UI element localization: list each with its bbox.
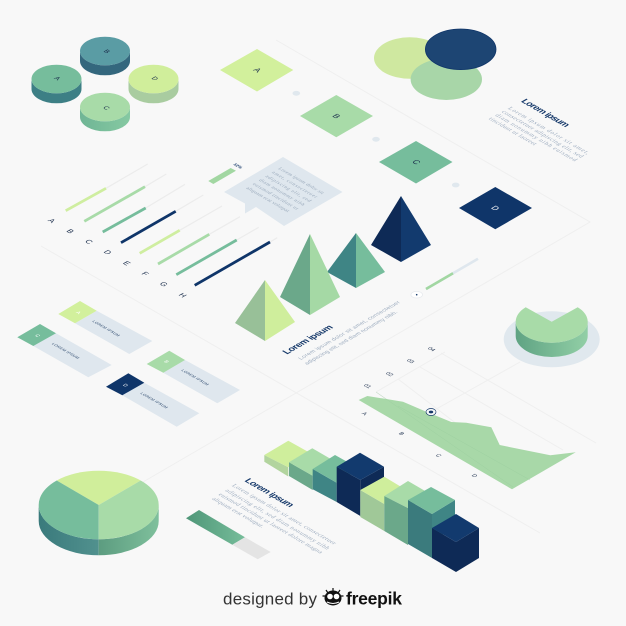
- text block: lower lorem ipsum: aliquam erat volutpat.: [210, 496, 266, 529]
- bar labels: D: [101, 249, 114, 256]
- progress bar: lower left: [186, 510, 271, 559]
- chart axis labels: 01: [362, 383, 372, 390]
- stacked block bars: [264, 441, 479, 572]
- bar H: [195, 242, 270, 285]
- list item C: [17, 324, 112, 377]
- area chart: [359, 346, 576, 489]
- list item B: LOREM IPSUM: [180, 368, 210, 386]
- list item A: LOREM IPSUM: [91, 319, 121, 337]
- disc A: A: [52, 76, 62, 82]
- legend swatch 12%: [208, 162, 244, 184]
- disc D: [128, 65, 178, 103]
- footer: designed by freepik: [223, 588, 402, 608]
- diamond A: A: [251, 67, 264, 74]
- bar labels: C: [83, 238, 96, 246]
- list item D: [106, 373, 199, 427]
- bar labels: H: [176, 292, 189, 299]
- callout: speech bubble: aliquam erat volutpat: [244, 186, 291, 213]
- diamond A: [220, 49, 293, 92]
- bar labels: E: [121, 260, 133, 267]
- disc C: [80, 93, 130, 131]
- block 2: [289, 448, 336, 490]
- text block: top right lorem ipsum: [487, 97, 592, 163]
- list item B: B: [162, 360, 170, 365]
- diamond C: [379, 141, 452, 184]
- callout: speech bubble: [224, 157, 342, 226]
- text block: lower lorem ipsum: [210, 477, 339, 555]
- icon: freepik bee: [322, 588, 344, 606]
- diamond B: [300, 95, 373, 137]
- block 1: [264, 441, 312, 476]
- text block: lower lorem ipsum: Lorem ipsum dolor sit amet, consectetuer: [230, 483, 339, 546]
- list item C: LOREM IPSUM: [51, 342, 81, 360]
- chart axis labels: B: [397, 432, 405, 437]
- venn diagram: [374, 29, 496, 100]
- diamond D: D: [489, 205, 502, 212]
- bar chart: horizontal isometric bars A-H: [46, 164, 277, 299]
- diamond C: C: [410, 159, 423, 166]
- callout: speech bubble: euismod tincidunt ut: [250, 182, 300, 211]
- chart axis labels: D: [470, 473, 478, 479]
- chart axis labels: 04: [426, 346, 436, 353]
- bar C: [103, 208, 146, 232]
- text block: top right lorem ipsum: diam nonummy nibh euismod: [493, 113, 580, 163]
- text block: top right lorem ipsum: tincidunt ut laoreet: [487, 116, 539, 147]
- callout: speech bubble: adipiscing elit, sed: [263, 174, 313, 203]
- list item A: A: [74, 311, 82, 316]
- panel: four discs A B C D: [32, 37, 178, 131]
- bar G: [176, 240, 237, 275]
- footer: designed by freepik: freepik: [346, 588, 402, 608]
- pie chart: large: [39, 471, 159, 555]
- bar D: [121, 211, 176, 243]
- progress slider: [411, 259, 478, 298]
- bar labels: G: [157, 281, 170, 288]
- pyramid chart: [235, 196, 431, 341]
- list item D: LOREM IPSUM: [139, 391, 169, 409]
- chart marker: [426, 408, 436, 416]
- text block: below pyramids: adipiscing elit, sed diam nonummy nibh.: [304, 310, 400, 366]
- text block: top right lorem ipsum: consectetuer adipiscing elit, sed: [499, 109, 586, 159]
- text block: lower lorem ipsum: euismod tincidunt ut laoreet dolore magna: [216, 492, 325, 555]
- disc B: [80, 37, 130, 75]
- chart axis labels: A: [360, 412, 368, 417]
- bar B: [84, 187, 145, 221]
- pyramid teal: [327, 233, 385, 288]
- bar E: [140, 230, 180, 253]
- block 7: [408, 487, 455, 558]
- block 3: [313, 455, 360, 502]
- diamond D: [459, 187, 532, 229]
- diamond B: B: [330, 113, 342, 120]
- chart axis labels: [360, 346, 478, 479]
- chart axis labels: 03: [405, 358, 415, 365]
- list item A: [58, 301, 152, 354]
- bar labels: A: [46, 217, 58, 224]
- legend swatch 12%: 12%: [232, 162, 244, 169]
- footer: designed by freepik: designed by: [223, 590, 318, 608]
- disc B: B: [101, 49, 111, 55]
- chart axis labels: 02: [384, 371, 394, 378]
- chart axis labels: C: [434, 453, 442, 459]
- disc A: [32, 65, 82, 103]
- block 4: [337, 453, 384, 516]
- block 5: [360, 477, 408, 531]
- disc C: C: [101, 105, 111, 111]
- pyramid green: [280, 234, 340, 315]
- callout: speech bubble: diam nonummy nibh: [257, 178, 307, 207]
- bar A: [66, 188, 106, 211]
- list item D: D: [121, 383, 129, 388]
- bar labels: B: [64, 228, 76, 235]
- bar labels: F: [139, 270, 151, 277]
- text block: below pyramids: Lorem ipsum: [280, 323, 335, 356]
- list item C: C: [33, 334, 42, 339]
- pyramid light: [235, 280, 295, 341]
- pyramid navy: [371, 196, 431, 262]
- text block: below pyramids: Lorem ipsum dolor sit amet, consectetuer: [298, 300, 402, 361]
- disc D: D: [149, 76, 160, 82]
- pie chart: small notched on plate: [504, 307, 600, 367]
- block 6: [384, 481, 432, 545]
- text block: top right lorem ipsum: Lorem ipsum: [519, 97, 572, 129]
- text block: lower lorem ipsum: adipiscing elit, sed diam nonummy nibh: [223, 488, 332, 551]
- bar labels: [46, 217, 189, 299]
- list item B: [147, 351, 240, 403]
- text block: lower lorem ipsum: Lorem ipsum: [242, 477, 297, 509]
- panel: diamond steps A B C D: [220, 49, 532, 229]
- block 8: [432, 514, 479, 572]
- callout: speech bubble: amet, consectetuer: [270, 171, 319, 199]
- callout: speech bubble: Lorem ipsum dolor sit: [276, 167, 326, 195]
- list items with labelled tabs: [17, 301, 240, 427]
- bar F: [158, 234, 209, 264]
- text block: top right lorem ipsum: Lorem ipsum dolor sit amet,: [506, 106, 592, 156]
